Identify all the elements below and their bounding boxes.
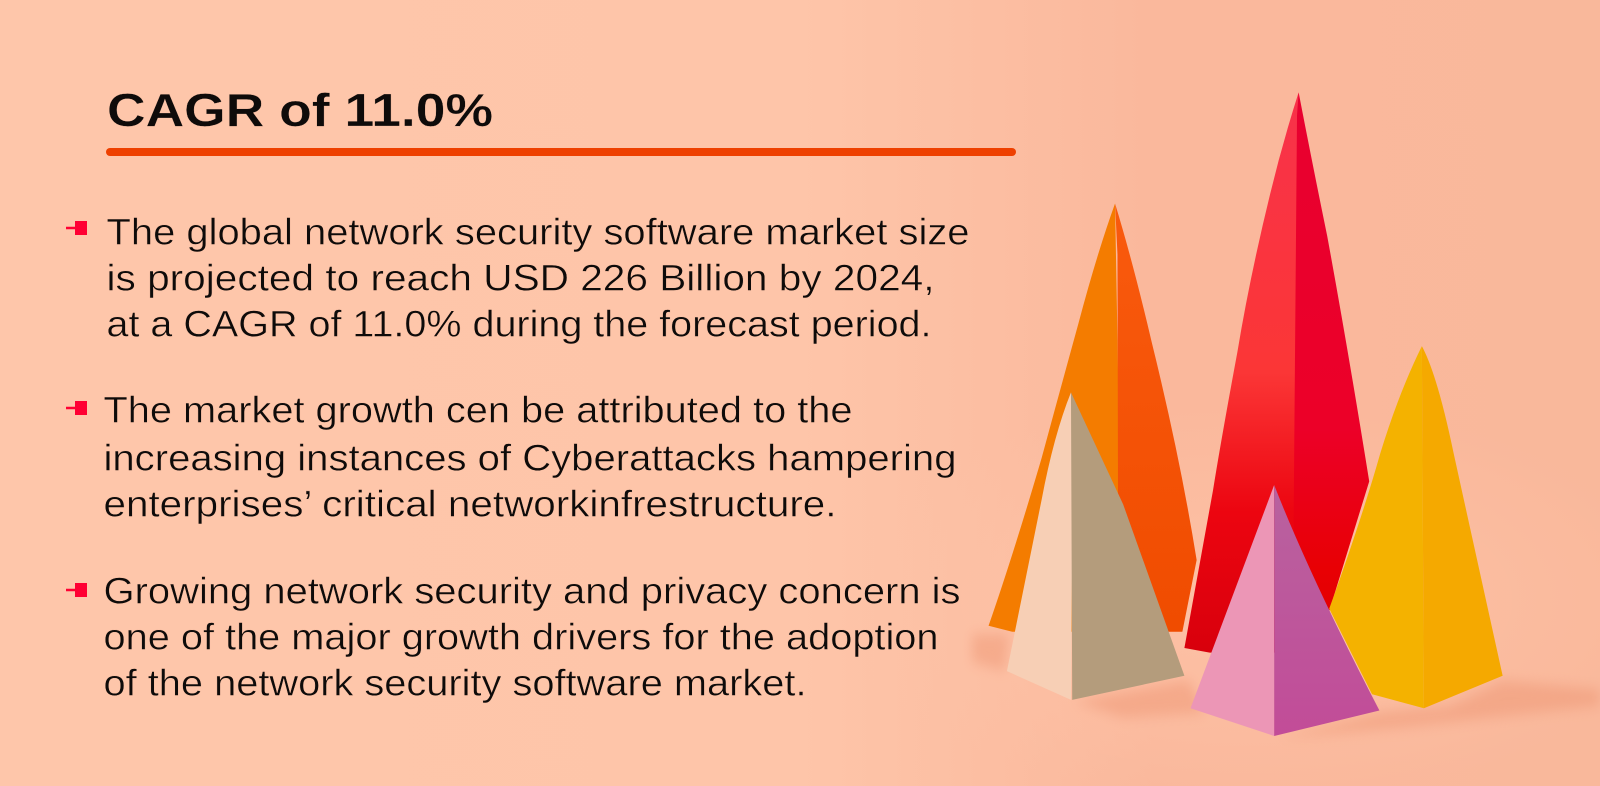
pyramid: pink xyxy=(1191,485,1379,736)
text: bullet 2 xyxy=(104,390,956,524)
icon: bullet 3 xyxy=(66,583,87,597)
text: bullet 1 xyxy=(106,212,970,344)
pyramid: beige xyxy=(1007,392,1184,700)
text: bullet 2: enterprises’ critical networkinfrestructure. xyxy=(104,484,836,524)
bullet block 1 xyxy=(66,212,970,344)
text: bullet 3: Growing network security and privacy concern is xyxy=(104,570,960,612)
text: bullet 3: one of the major growth drivers for the adoption xyxy=(104,616,939,658)
text: bullet 1: The global network security software market size xyxy=(106,212,970,252)
pyramid: orange xyxy=(989,204,1197,632)
text: bullet 2: increasing instances of Cyberattacks hampering xyxy=(104,438,956,478)
title underline xyxy=(106,148,1016,156)
bullet block 2 xyxy=(66,390,956,524)
icon: bullet 1 xyxy=(66,221,87,235)
icon: bullet 2 xyxy=(66,401,87,415)
pyramid: red xyxy=(1184,92,1369,653)
text: bullet 1: is projected to reach USD 226 Billion by 2024, xyxy=(106,258,934,298)
pyramid: yellow xyxy=(1329,346,1503,708)
text: bullet 3 xyxy=(104,570,960,704)
text: bullet 2: The market growth cen be attributed to the xyxy=(104,390,852,430)
bullet block 3 xyxy=(66,570,960,704)
text: bullet 3: of the network security software market. xyxy=(104,662,807,704)
image: paper pyramids xyxy=(972,92,1600,738)
text: bullet 1: at a CAGR of 11.0% during the forecast period. xyxy=(106,304,932,344)
title: CAGR of 11.0% xyxy=(107,84,493,136)
floor shadows xyxy=(972,634,1600,738)
